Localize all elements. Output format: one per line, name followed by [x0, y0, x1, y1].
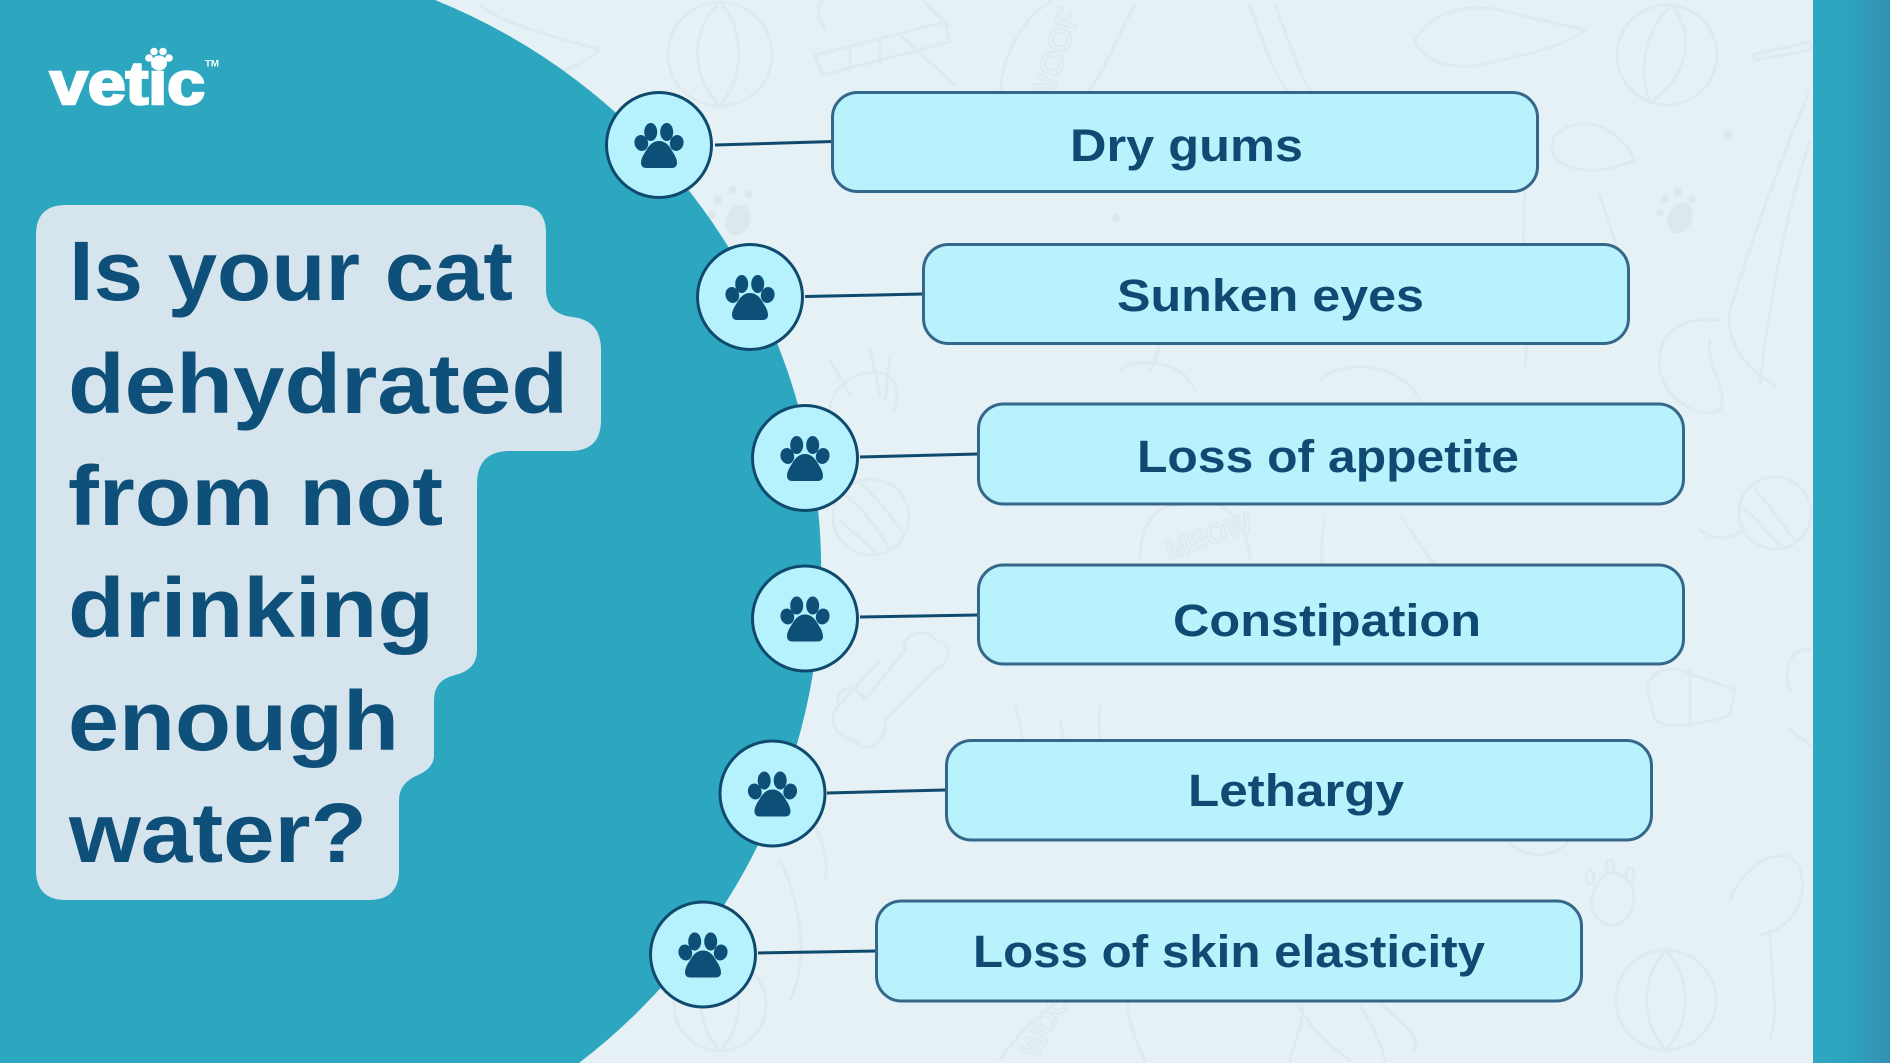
symptom row: loss of skin elasticity: Loss of skin elasticity: [973, 926, 1485, 977]
background doodle pattern: balls, bones, paws, cats: [455, 2, 1812, 1063]
symptom row: dry gums: Dry gums: [1070, 120, 1303, 171]
symptom row: constipation: Constipation: [1173, 595, 1481, 646]
large teal semicircle: [0, 0, 821, 1063]
background doodle pattern: balls, bones, paws, cats: WOOF: [1015, 972, 1085, 1063]
symptom row: loss of skin elasticity: [650, 901, 1582, 1007]
background doodle pattern: balls, bones, paws, cats: WOOF: [1022, 4, 1087, 109]
title highlight panel with title: enough: [68, 674, 399, 768]
symptom row: loss of appetite: Loss of appetite: [1137, 431, 1519, 482]
title highlight panel with title: from not: [68, 449, 443, 543]
symptom row: lethargy: [720, 740, 1652, 846]
vetic logo: TM: [205, 58, 219, 68]
vetic logo: vetic: [50, 50, 205, 117]
symptom row: sunken eyes: [698, 244, 1628, 350]
title highlight panel with title: Is your cat: [69, 224, 513, 318]
title highlight panel with title: [36, 205, 601, 900]
symptom row: sunken eyes: Sunken eyes: [1117, 270, 1424, 321]
right edge teal band: [1813, 0, 1890, 1063]
title highlight panel with title: dehydrated: [68, 337, 568, 431]
symptom row: dry gums: [606, 92, 1538, 198]
symptom row: loss of appetite: [752, 404, 1684, 510]
background doodle pattern: balls, bones, paws, cats: MEOW: [1161, 506, 1257, 566]
symptom row: constipation: [752, 565, 1684, 671]
title highlight panel with title: water?: [68, 786, 367, 880]
symptom row: lethargy: Lethargy: [1188, 765, 1404, 816]
title highlight panel with title: drinking: [68, 561, 434, 655]
